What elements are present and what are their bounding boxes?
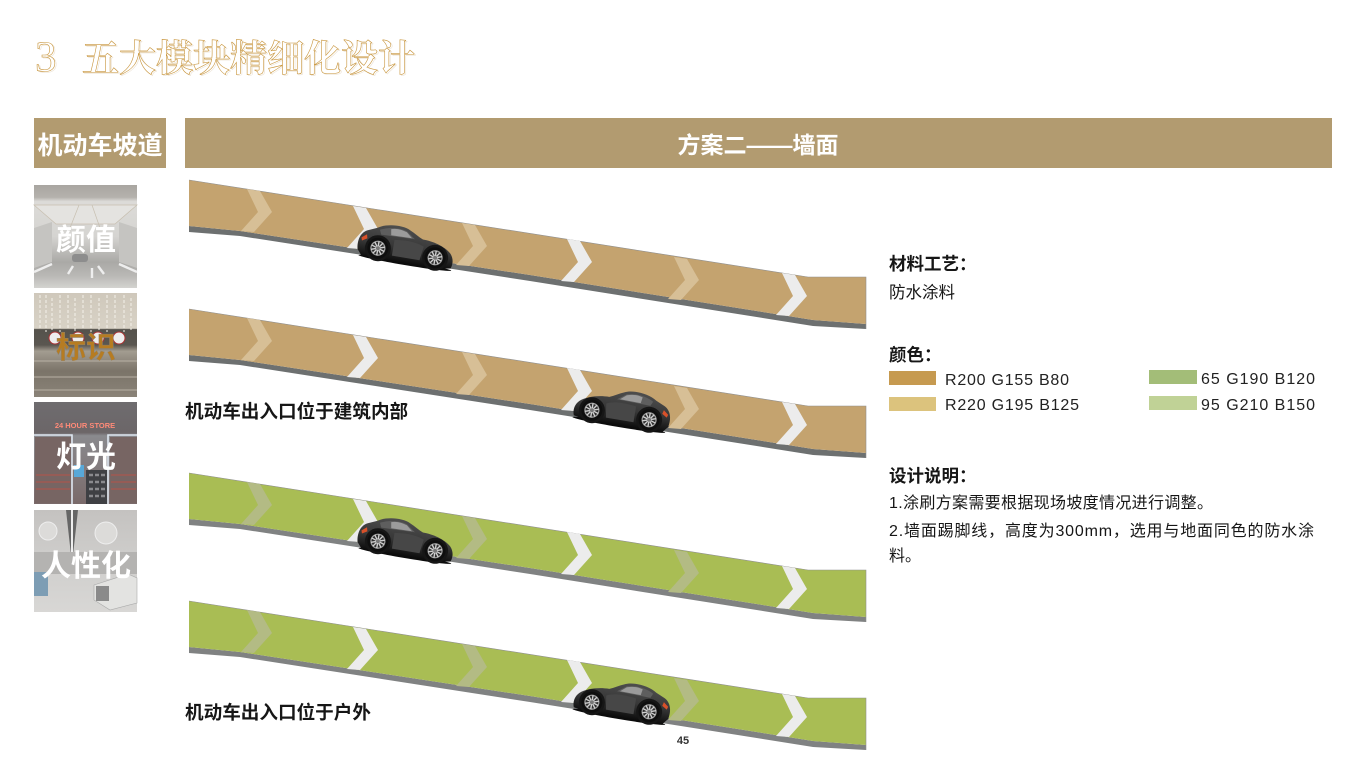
section tab: 机动车坡道: 机动车坡道: [37, 132, 163, 160]
section tab: 机动车坡道: [34, 118, 166, 168]
title: 3: [35, 34, 56, 81]
title: 五大模块精细化设计: [83, 29, 416, 83]
heading bar: 方案二——墙面: 方案二——墙面: [678, 132, 838, 158]
thumbnail: 灯光: 灯光: [56, 441, 116, 474]
text block: design notes: [889, 466, 1314, 565]
swatch: tan dark: [889, 371, 936, 385]
thumbnail: 颜值: [34, 185, 137, 288]
legend: colours: 颜色：: [889, 345, 942, 365]
title: 五大模块精细化设计: [82, 28, 415, 82]
ramp: tan wall B: [189, 309, 866, 458]
text block: materials: 材料工艺：: [889, 254, 976, 274]
swatch: green dark: [1149, 370, 1197, 384]
heading bar: 方案二——墙面: [185, 118, 1332, 168]
thumbnail: 人性化: 人性化: [41, 550, 131, 583]
text block: design notes: 设计说明：: [889, 466, 976, 486]
title: 3: [36, 35, 58, 82]
thumbnail: 标识: 标识: [56, 332, 116, 365]
swatch label: tan light: R220 G195 B125: [945, 397, 1079, 414]
thumbnail: 颜值: 颜值: [56, 224, 116, 257]
swatch: green light: [1149, 396, 1197, 410]
text block: design notes: 2.墙面踢脚线，高度为300mm，选用与地面同色的防水涂: [889, 522, 1314, 540]
car on ramp D: [572, 674, 674, 728]
text block: materials: 防水涂料: [889, 283, 955, 302]
caption: indoor entrance: 机动车出入口位于建筑内部: [185, 401, 409, 422]
ramp: tan wall A: [189, 180, 866, 329]
ramp: green wall B: [189, 601, 866, 750]
swatch label: green dark: 65 G190 B120: [1201, 371, 1315, 388]
car on ramp C: [355, 513, 457, 567]
text block: design notes: 1.涂刷方案需要根据现场坡度情况进行调整。: [889, 494, 1213, 512]
thumbnail: 灯光: [34, 402, 137, 504]
swatch: tan light: [889, 397, 936, 411]
swatch label: green light: 95 G210 B150: [1201, 397, 1315, 414]
swatch label: tan dark: R200 G155 B80: [945, 372, 1069, 389]
caption: outdoor entrance: 机动车出入口位于户外: [185, 702, 371, 723]
text block: design notes: 料。: [889, 547, 921, 565]
car on ramp A: [355, 220, 457, 274]
car on ramp B: [572, 382, 674, 436]
page number: 45: [677, 735, 689, 747]
thumbnail: 人性化: [34, 510, 137, 612]
ramp: green wall A: [189, 473, 866, 622]
text block: materials: [889, 254, 976, 302]
legend: colours: [889, 345, 1315, 414]
thumbnail: 灯光: 24 HOUR STORE: [55, 421, 115, 430]
thumbnail: 标识: [34, 293, 137, 397]
